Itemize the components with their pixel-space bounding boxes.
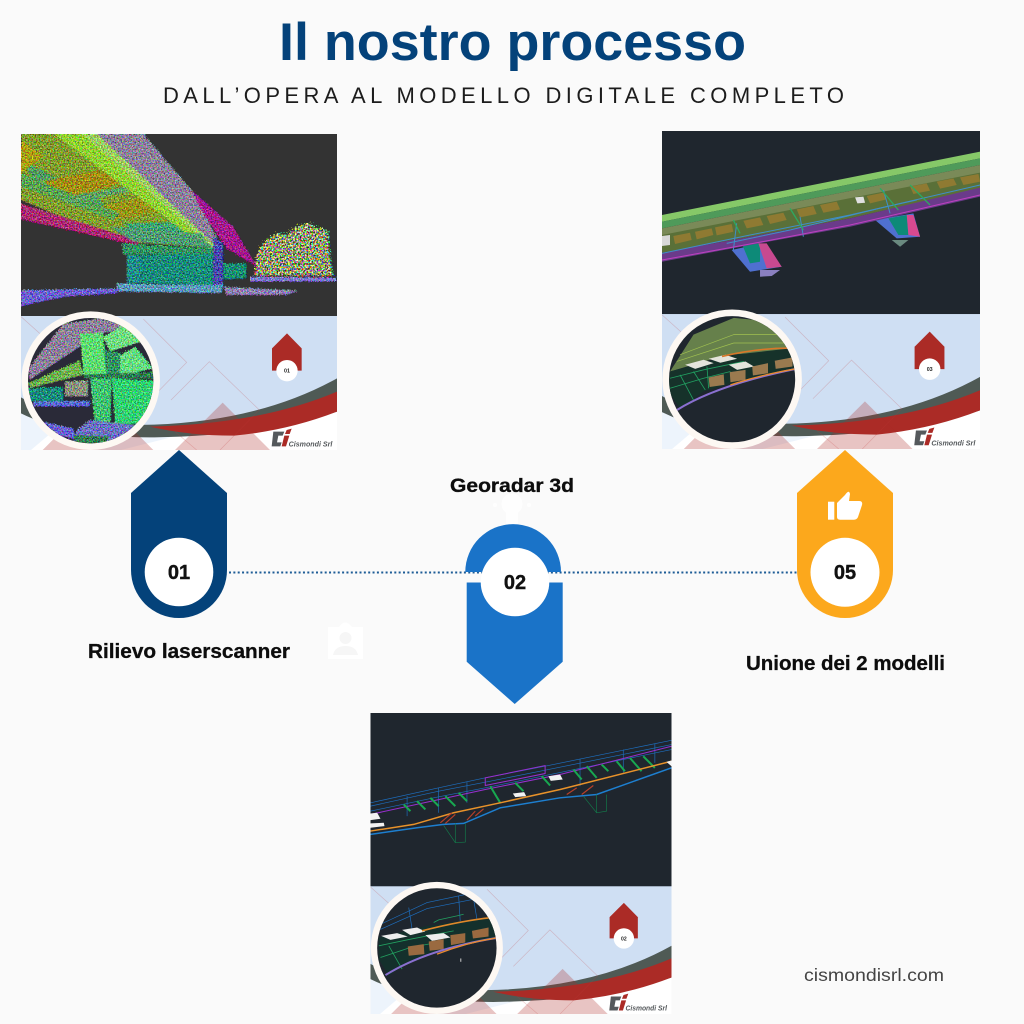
title: Il nostro processo	[279, 13, 746, 72]
panel: step 3 merged model image	[662, 131, 980, 449]
company logo: Cismondi Srl	[289, 439, 333, 448]
pin: step 01	[131, 450, 227, 618]
company logo	[272, 429, 333, 448]
company logo	[914, 428, 976, 447]
subtitle: DALL’OPERA AL MODELLO DIGITALE COMPLETO	[163, 83, 844, 108]
pin: step 02	[465, 524, 563, 704]
point cloud bridge from below	[21, 133, 337, 316]
icon: thumbs up	[828, 492, 862, 520]
template band	[21, 317, 337, 450]
detail circle: close-up of pier	[21, 311, 161, 450]
detail circle: close-up of deck	[662, 309, 803, 449]
company logo	[609, 994, 668, 1013]
template band	[370, 887, 672, 1014]
company logo: Cismondi Srl	[625, 1006, 668, 1013]
connector: dotted timeline	[229, 572, 797, 574]
step badge 03	[915, 332, 944, 380]
icon: faded clipboard person	[328, 622, 363, 659]
label: Rilievo laserscanner: Rilievo laserscanner	[88, 641, 290, 663]
pin: step 02: 02	[504, 572, 526, 594]
step badge 01: 01	[284, 369, 290, 375]
wireframe bridge model	[370, 713, 672, 886]
step badge 01	[272, 333, 302, 381]
step badge 02	[610, 903, 638, 949]
detail circle: close-up of wireframe	[370, 882, 504, 1014]
merged bridge model	[662, 131, 980, 314]
template band	[662, 315, 980, 449]
label: Unione dei 2 modelli: Unione dei 2 modelli	[746, 653, 945, 675]
footer: website: cismondisrl.com	[804, 965, 944, 985]
company logo: Cismondi Srl	[931, 438, 976, 447]
panel: step 2 georadar model image	[370, 713, 672, 1014]
panel: step 1 laser scan image	[21, 134, 337, 450]
pin: step 05: 05	[834, 562, 856, 584]
step badge 03: 03	[927, 367, 933, 373]
icon: faded light bulb	[493, 494, 531, 526]
tree point cloud	[255, 223, 333, 277]
pin: step 01: 01	[168, 562, 190, 584]
step badge 02: 02	[621, 936, 627, 942]
label: Georadar 3d: Georadar 3d	[450, 476, 574, 497]
pin: step 05	[797, 450, 893, 618]
